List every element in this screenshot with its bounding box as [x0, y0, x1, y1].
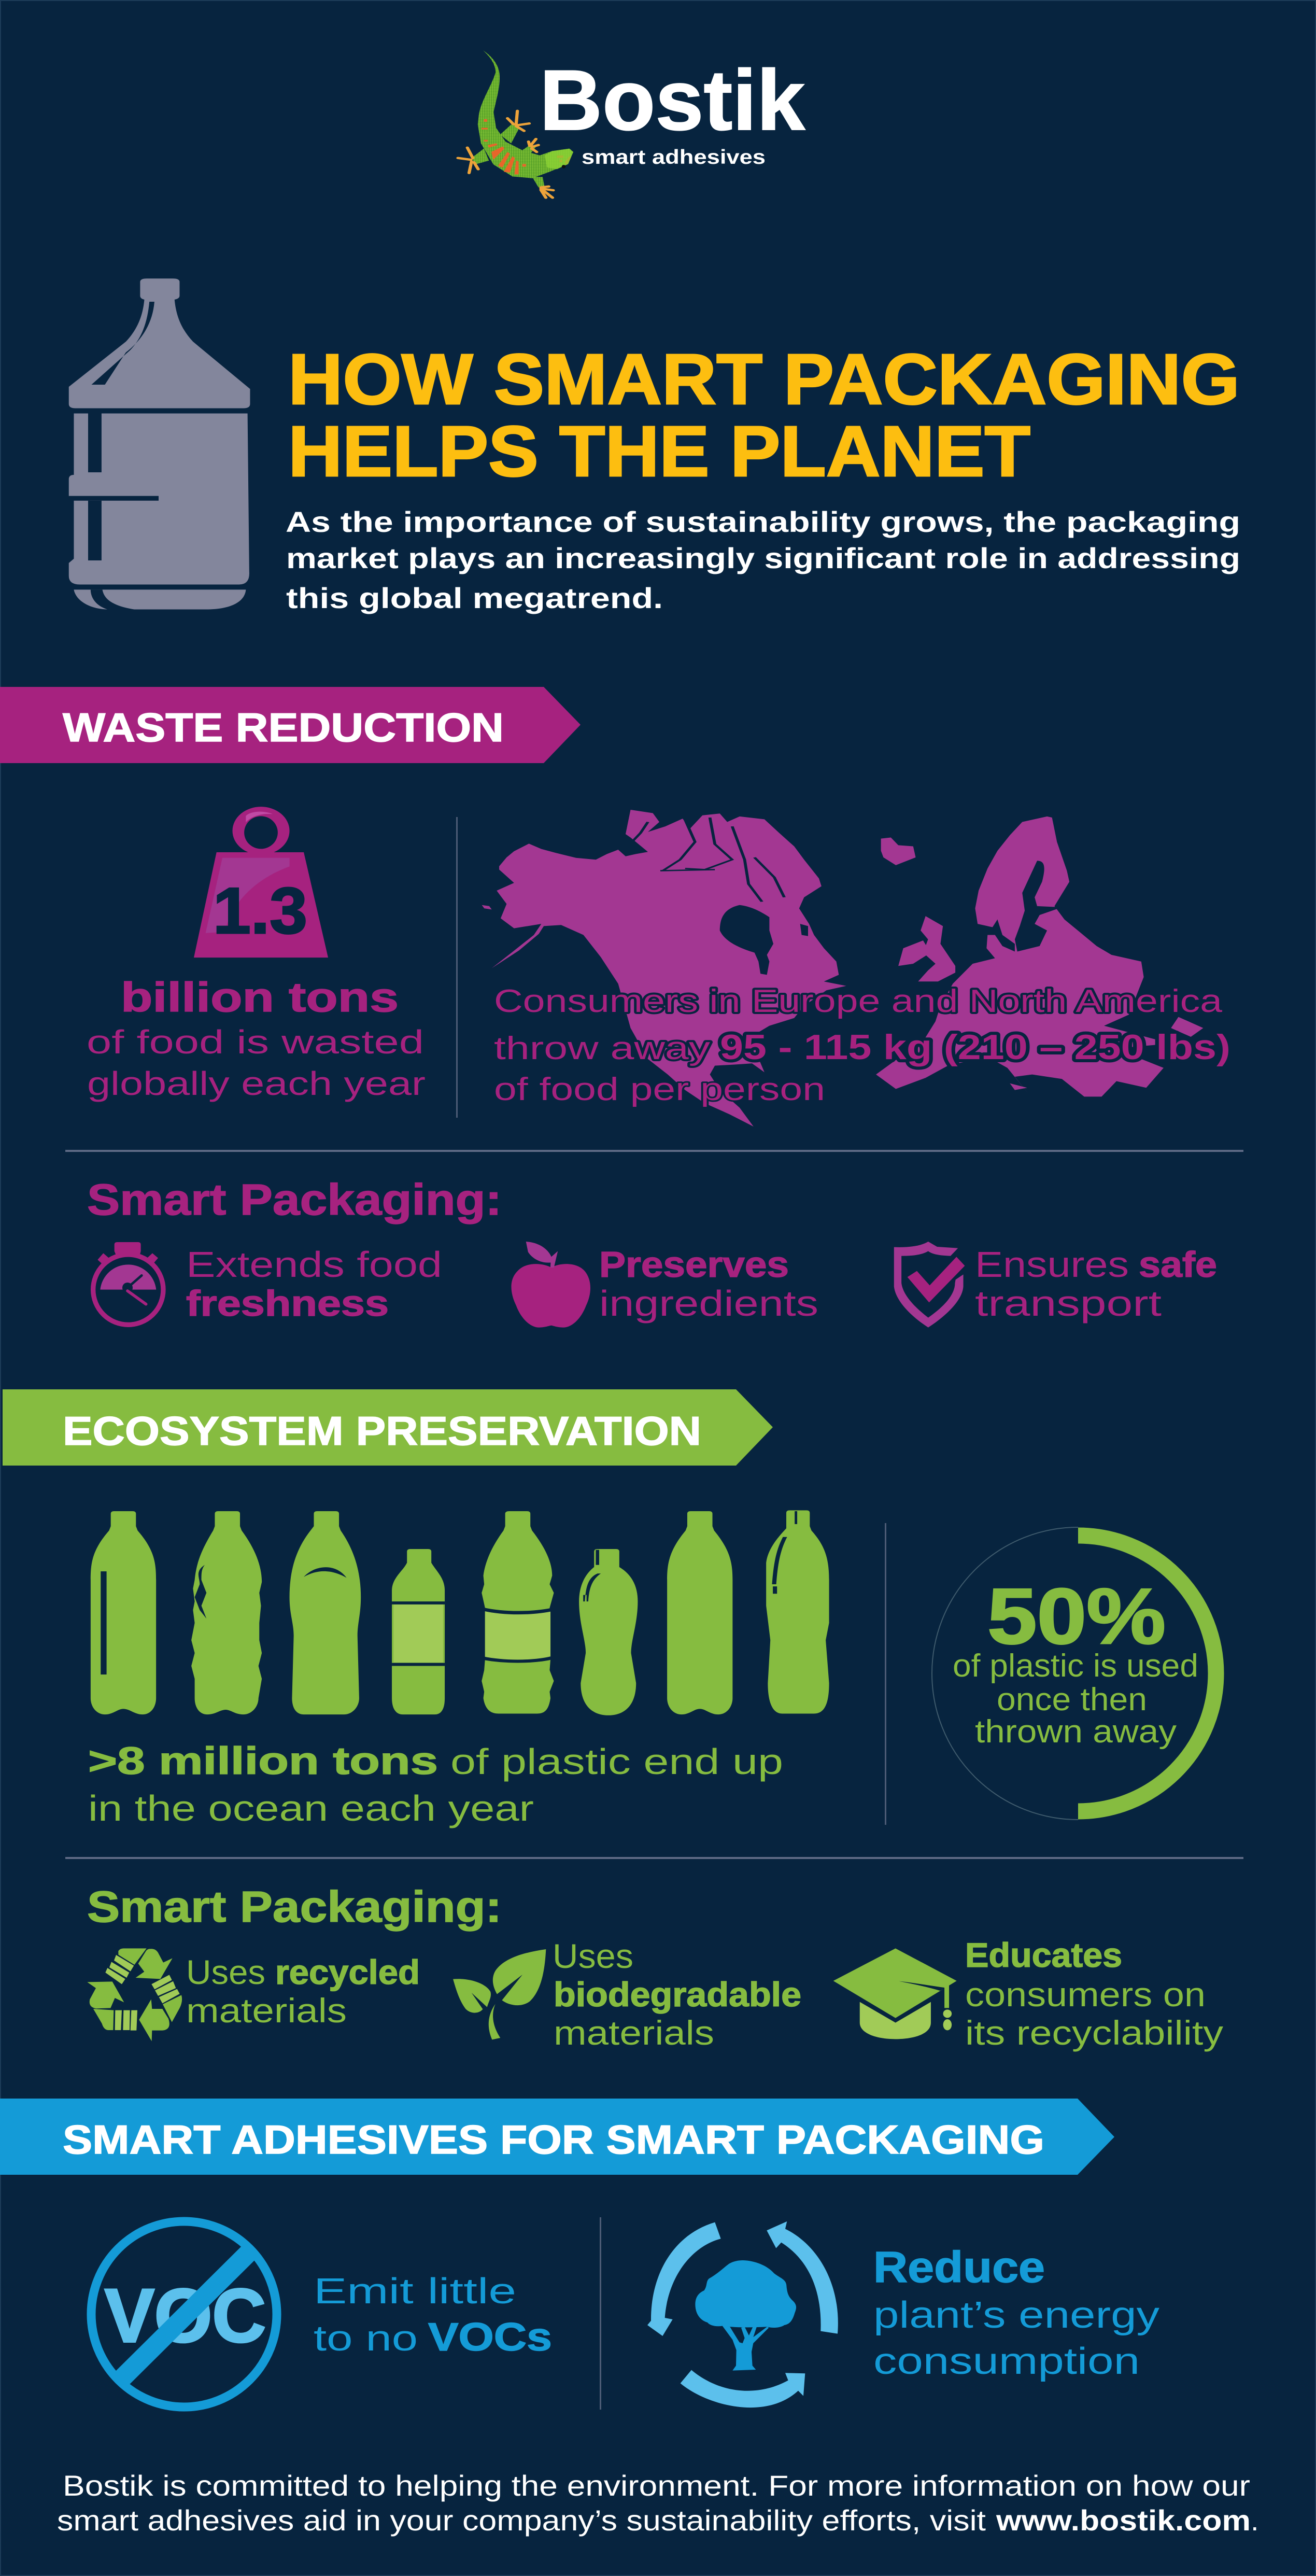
- title: HOW SMART PACKAGING: [288, 340, 1240, 419]
- stat: billion tons of food wasted: [87, 974, 426, 1102]
- logo: Bostik smart adhesives: [458, 50, 805, 198]
- text: ensures safe transport: safe: [1139, 1244, 1217, 1285]
- heading: smart packaging: Smart Packaging:: [87, 1175, 502, 1224]
- icon: apple: [512, 1242, 590, 1328]
- text: uses recycled materials: [186, 1953, 420, 2030]
- text: uses biodegradable materials: biodegradable: [554, 1975, 801, 2014]
- text: 8 million tons of plastic: in the ocean each year: [88, 1788, 534, 1828]
- icon: weight with 1.3: 1.3: [213, 874, 307, 947]
- footer text: Bostik is committed to helping the environment. For more information on how our: [63, 2469, 1250, 2502]
- text: reduce plant energy consumption: [873, 2243, 1159, 2382]
- icon: shield with check: [894, 1242, 965, 1328]
- panel: header: [69, 278, 1240, 614]
- chart: 50 percent donut: 50%: [987, 1572, 1166, 1660]
- text: reduce plant energy consumption: plant’s energy: [873, 2295, 1159, 2336]
- intro text: this global megatrend.: [286, 582, 663, 614]
- text: uses biodegradable materials: materials: [554, 2014, 714, 2052]
- text: extends food freshness: freshness: [186, 1283, 389, 1324]
- banner: waste reduction: WASTE REDUCTION: [63, 705, 504, 750]
- text: ensures safe transport: Ensures: [975, 1244, 1129, 1285]
- text: extends food freshness: [186, 1244, 442, 1324]
- text: educates consumers: [965, 1936, 1223, 2052]
- footer text: www.bostik.com: [996, 2504, 1251, 2537]
- text: educates consumers: its recyclability: [965, 2014, 1223, 2052]
- text: preserves ingredients: ingredients: [599, 1283, 818, 1324]
- chart: 50 percent donut: of plastic is used: [953, 1648, 1198, 1684]
- text: consumers throw away food: 95 - 115 kg (210 – 250 lbs): [720, 1027, 1230, 1067]
- text: 8 million tons of plastic: of plastic end up: [450, 1741, 783, 1782]
- text: consumers throw away food: of food per person: [494, 1072, 825, 1107]
- logo tagline: smart adhesives: [582, 146, 766, 168]
- icon: graduation cap: [833, 1948, 957, 2039]
- banner: smart adhesives for smart packaging: SMART ADHESIVES FOR SMART PACKAGING: [63, 2117, 1044, 2162]
- icon: stopwatch: [93, 1242, 163, 1325]
- icon: no VOC: VOC: [105, 2273, 266, 2358]
- text: uses biodegradable materials: [553, 1937, 801, 2052]
- intro text: [286, 505, 1240, 614]
- text: consumers throw away food: Consumers in Europe and North America: [494, 983, 1223, 1019]
- text: ensures safe transport: [975, 1244, 1217, 1324]
- banner: ecosystem preservation: [3, 1389, 773, 1466]
- banner: ecosystem preservation: ECOSYSTEM PRESERVATION: [63, 1408, 701, 1454]
- chart: 50 percent donut: thrown away: [975, 1714, 1177, 1750]
- text: uses recycled materials: materials: [186, 1991, 347, 2030]
- text: emit little to no VOCs: VOCs: [428, 2315, 552, 2359]
- text: uses recycled materials: recycled: [275, 1953, 420, 1991]
- stat: billion tons of food wasted: of food is wasted: [87, 1023, 424, 1061]
- text: emit little to no VOCs: [314, 2271, 552, 2359]
- text: ensures safe transport: transport: [975, 1283, 1162, 1324]
- text: reduce plant energy consumption: consumption: [873, 2341, 1140, 2382]
- icon: row of plastic bottles: [91, 1510, 829, 1715]
- icon: weight with 1.3: [194, 807, 328, 958]
- footer text: smart adhesives aid in your company’s sustainability efforts, visit: [57, 2504, 986, 2537]
- text: emit little to no VOCs: to no: [314, 2318, 418, 2358]
- text: preserves ingredients: Preserves: [599, 1244, 789, 1285]
- logo wordmark: Bostik: [540, 52, 805, 148]
- footer text: [57, 2469, 1259, 2537]
- title: [288, 340, 1240, 491]
- stat: billion tons of food wasted: globally each year: [87, 1065, 426, 1102]
- text: educates consumers: consumers on: [965, 1975, 1206, 2014]
- icon: water cooler bottle: [69, 278, 250, 610]
- panel: waste reduction: [0, 687, 1243, 1328]
- heading: smart packaging: Smart Packaging:: [87, 1882, 502, 1931]
- text: preserves ingredients: [599, 1244, 818, 1324]
- icon: no VOC: [91, 2221, 277, 2407]
- intro text: As the importance of sustainability grows, the packaging: [286, 505, 1240, 538]
- text: emit little to no VOCs: Emit little: [314, 2271, 516, 2311]
- text: uses biodegradable materials: Uses: [553, 1937, 633, 1975]
- text: reduce plant energy consumption: Reduce: [873, 2243, 1045, 2291]
- banner: smart adhesives for smart packaging: [0, 2099, 1114, 2175]
- chart: 50 percent donut: once then: [997, 1682, 1147, 1718]
- stat: billion tons of food wasted: billion tons: [121, 974, 399, 1020]
- chart: 50 percent donut: [932, 1527, 1216, 1820]
- panel: smart adhesives: [0, 2099, 1159, 2410]
- icon: gecko: [458, 50, 573, 198]
- text: uses recycled materials: Uses: [186, 1953, 265, 1991]
- text: 8 million tons of plastic: [88, 1739, 783, 1828]
- title: HELPS THE PLANET: [288, 412, 1030, 491]
- intro text: market plays an increasingly significant role in addressing: [286, 542, 1240, 574]
- text: extends food freshness: Extends food: [186, 1244, 442, 1285]
- footer text: .: [1251, 2504, 1259, 2537]
- text: 8 million tons of plastic: >8 million tons: [88, 1739, 438, 1782]
- icon: tree with cycle arrows: [647, 2221, 838, 2408]
- panel: ecosystem preservation: [3, 1389, 1243, 2052]
- text: consumers throw away food: throw away: [494, 1031, 710, 1066]
- banner: waste reduction: [0, 687, 581, 763]
- icon: leaves: [453, 1949, 546, 2039]
- map: North America and Europe: [482, 810, 1203, 1127]
- icon: recycling arrows: [87, 1948, 182, 2041]
- text: educates consumers: Educates: [965, 1936, 1122, 1974]
- text: consumers throw away food: [494, 983, 1230, 1107]
